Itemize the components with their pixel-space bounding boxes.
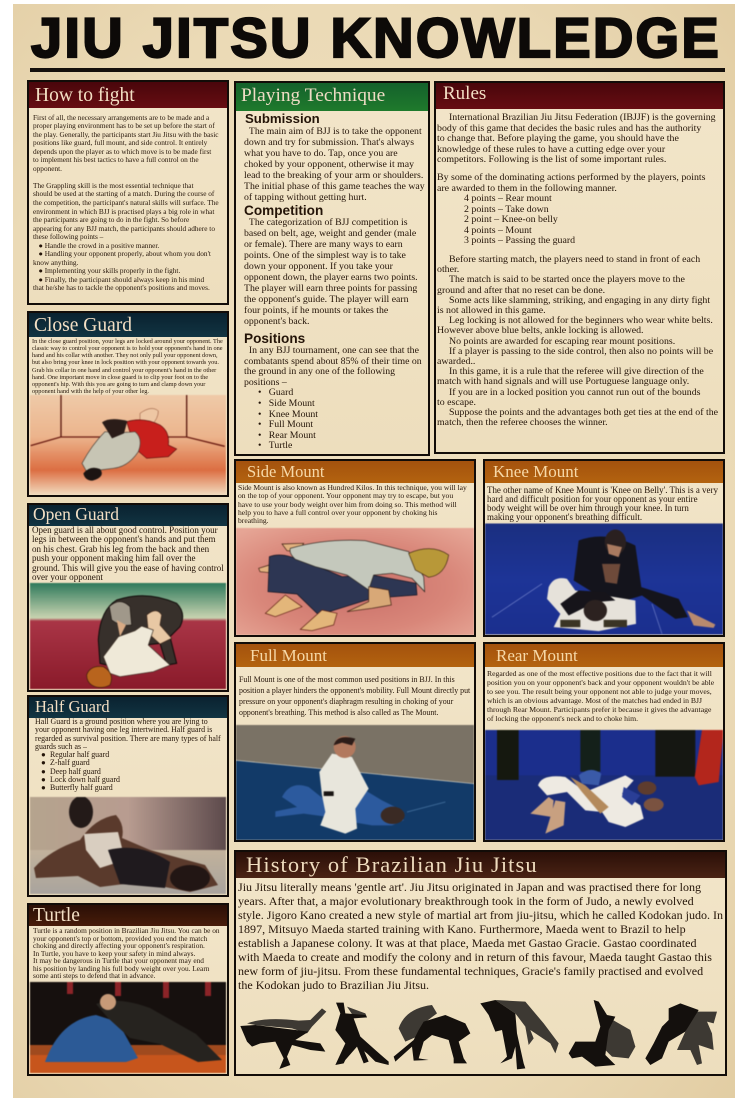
text: rules points list: 2 points – Take down — [464, 204, 549, 214]
text: history: the Kodokan judo to Brazilian Jiu Jitsu. — [238, 978, 429, 992]
text: rules intro: International Brazilian Jiu Jitsu Federation (IBJJF) is the governing — [449, 112, 716, 123]
text: rules intro: competitors. Following is the list of some important rules. — [437, 154, 666, 165]
text: side mount: on the top of your opponent. Your opponent may try to escape, but you — [238, 491, 453, 500]
text: turtle: In Turtle, you have to keep your safety in mind always. — [33, 948, 195, 958]
text: how to fight — [33, 112, 219, 292]
heading: history: History of Brazilian Jiu Jitsu — [246, 852, 538, 877]
text: how to fight: ● Handling your opponent properly, about whom you don't — [38, 249, 211, 258]
heading: open guard: Open Guard — [33, 504, 119, 524]
text: competition: The player will earn three points for passing — [244, 283, 417, 294]
text: knee mount: making your opponent's breathing difficult. — [487, 512, 642, 522]
text: turtle: Turtle is a random position in Brazilian Jiu Jitsu. You can be on — [33, 926, 220, 935]
text: rules points list: 2 point – Knee-on belly — [464, 214, 558, 225]
text: rules points list: 4 points – Mount — [464, 224, 532, 236]
heading: half guard — [29, 697, 227, 718]
heading: turtle — [29, 905, 227, 926]
text: open guard — [32, 525, 224, 582]
text: half guard: Lock down half guard — [50, 775, 120, 784]
panel: knee mount — [483, 459, 725, 637]
text: rules details: awarded.. — [437, 356, 475, 367]
text: half guard — [35, 717, 221, 792]
text: close guard: hand and his collar with another. They not only pull your opponent down, — [32, 352, 218, 359]
text: how to fight: depends upon the player as to which move is to be made first — [33, 147, 211, 156]
text: positions: In any BJJ tournament, one can see that the — [249, 345, 419, 356]
text: how to fight: environment in which BJJ is practised plays a big role in what — [33, 207, 214, 216]
text: rules details: No points are awarded for escaping rear mount positions. — [449, 336, 675, 347]
text: rear mount: through Rear Mount. Participants prefer it because it gives the advantage — [487, 705, 711, 714]
text: how to fight: should be used at the starting of a match. During the course of — [33, 189, 214, 198]
text: competition — [244, 217, 418, 327]
text: history: years. After that, a major evolutionary breakthrough took in the form of Judo, a newly evolved — [238, 894, 694, 908]
text: positions: combatants spend about 85% of their time on — [244, 356, 422, 367]
text: positions: • Knee Mount — [258, 409, 318, 420]
text: rules details: The match is said to be started once the players move to the — [449, 274, 685, 285]
text: positions: • Rear Mount — [258, 430, 316, 441]
heading: close guard — [29, 313, 227, 337]
text: rules details: If you are in a locked position you cannot run out of the bounds — [449, 387, 700, 398]
text: knee mount — [487, 485, 718, 522]
text: rear mount: Regarded as one of the most effective positions due to the fact that it will — [487, 669, 712, 678]
text: turtle: choking and directly affecting your opponent's respiration. — [33, 941, 205, 950]
text: submission: The main aim of BJJ is to take the opponent — [249, 126, 422, 137]
text: how to fight: these following points – — [33, 232, 103, 241]
text: rules points list: By some of the dominating actions performed by the players, points — [437, 172, 706, 183]
illustration: close guard — [29, 394, 227, 494]
text: half guard: Butterfly half guard — [50, 783, 113, 792]
text: half guard: Z-half guard — [50, 758, 90, 767]
text: how to fight: proper playing environment has to be set up before the start of — [33, 121, 215, 130]
text: open guard: on his chest. Grab his leg from the back and then — [32, 544, 209, 554]
text: side mount: have to use your body weight over him from doing so. This method will — [238, 500, 457, 509]
text: submission: what you have to do. Tap, once you are — [244, 148, 398, 159]
text: rules details: match, then the referee chooses the winner. — [437, 417, 608, 428]
text: positions: • Full Mount — [258, 419, 313, 430]
heading: rear mount — [485, 644, 723, 667]
text: submission: choked by your opponent, otherwise it may — [244, 159, 414, 170]
heading: knee mount — [485, 461, 723, 483]
text: open guard: ground. This will give you the ease of having control — [32, 563, 224, 573]
text: close guard: In the close guard position, your legs are locked around your opponent. The — [32, 338, 223, 345]
text: side mount: breathing. — [238, 516, 269, 525]
text: side mount: help you to have a full control over your opponent by choking his — [238, 508, 438, 517]
panel: how to fight — [27, 80, 229, 305]
text: rules points list — [437, 172, 706, 246]
text: rules intro: to change that. Before playing the game, you should have the — [437, 133, 679, 144]
text: how to fight: ● Implementing your skills properly in the fight. — [38, 266, 180, 275]
text: rear mount — [487, 669, 714, 723]
text: half guard: ● — [41, 783, 46, 792]
text: half guard: guards such as – — [35, 742, 87, 751]
text: positions: • Guard — [258, 387, 293, 398]
text: history — [238, 880, 723, 992]
text: open guard: legs in between the opponent's hands and put them — [32, 534, 216, 544]
text: how to fight: the participants are going to do in the fight. So before — [33, 215, 189, 224]
text: close guard: classic way to control your opponent is to hold your opponent's hand in one — [32, 345, 223, 352]
text: knee mount: body weight will be over him through your knee. In turn — [487, 503, 689, 513]
heading: how to fight: How to fight — [35, 85, 135, 106]
text: rules points list: 3 points – Passing the guard — [464, 235, 575, 246]
text: rules details: If a player is passing to the side control, then also no points will be — [449, 346, 713, 357]
photo: half guard — [30, 796, 227, 894]
text: half guard: regarded as survival position. There are many types of half — [35, 734, 221, 742]
panel: rules — [434, 81, 725, 454]
heading: playing technique — [236, 83, 428, 111]
text: competition: opponent down, the player earns two points. — [244, 272, 418, 283]
text: half guard: Hall Guard is a ground position where you are lying to — [35, 717, 208, 726]
text: full mount: opponent's breathing. This method is also called as The Mount. — [239, 708, 438, 717]
text: competition: down your opponent. If you take your — [244, 261, 393, 272]
text: rules details: ground and after that no reset can be done. — [437, 285, 605, 296]
text: full mount: position a player hinders the opponent's mobility. Full Mount directly put — [239, 686, 470, 695]
text: rear mount: position you on your opponent's back and your opponent wouldn't be able — [487, 678, 714, 687]
text: rules details — [437, 254, 718, 428]
text: close guard: opponent hand with the help of your other leg. — [32, 388, 149, 395]
panel: side mount — [234, 459, 476, 637]
text: rules intro: body of this game that decides the basic rules and has the authority — [437, 122, 701, 134]
text: history: Jiu Jitsu literally means 'gentle art'. Jiu Jitsu originated in Japan and was practised there for long — [238, 880, 701, 894]
text: submission: of tapping without getting hurt. — [244, 192, 367, 203]
text: turtle: It may be dangerous in Turtle that your opponent may end — [33, 956, 204, 965]
text: submission — [244, 126, 425, 203]
text: full mount: pressure on your opponent's diaphragm resulting in choking of your — [239, 697, 453, 706]
text: competition: the opponent's guide. The player will earn — [244, 294, 409, 305]
text: history: new form of jiu-jitsu. From these fundamental techniques, Gracie's family practised and evolved — [238, 964, 703, 978]
text: turtle — [33, 926, 220, 980]
text: close guard: hand. One important move in close guard is to clip your foot on to the — [32, 374, 208, 381]
text: half guard: Deep half guard — [50, 766, 101, 776]
text: rear mount: which is an obvious advantage. Most of the matches had ended in BJJ — [487, 696, 702, 705]
text: how to fight: the play. Generally, the participants start Jiu Jitsu with the basic — [33, 130, 218, 139]
text: open guard: over your opponent — [32, 572, 103, 582]
text: how to fight: ● Handle the crowd in a positive manner. — [38, 241, 159, 250]
text: history: style. Jigoro Kano created a new style of martial art from jiu-jitsu, which he called Kodokan judo. In — [238, 908, 723, 922]
heading: rules: Rules — [443, 83, 486, 104]
text: competition: based on belt, age, weight and gender (male — [244, 228, 416, 239]
text: full mount: Full Mount is one of the most common used positions in BJJ. In this — [239, 675, 455, 684]
heading: full mount — [236, 644, 474, 667]
text: how to fight: to implement his best tactics to have a full control on the — [33, 155, 199, 164]
panel: open guard — [27, 503, 229, 692]
text: positions: • Turtle — [258, 440, 292, 451]
text: half guard: ● — [41, 775, 46, 784]
subheading: competition: Competition — [244, 203, 323, 218]
text: open guard: Open guard is all about good control. Position your — [32, 525, 218, 535]
text: rules details: Some acts like slamming, striking, and engaging in any dirty fight — [449, 295, 710, 306]
heading: rules — [436, 83, 723, 109]
text: rules details: to escape. — [437, 397, 476, 408]
heading: side mount: Side Mount — [247, 462, 324, 481]
text: close guard: opponent's hip. With this you are going to turn and clamp down your — [32, 381, 205, 388]
text: history: 1897, Mitsuyo Maeda started training with Kano. Furthermore, Maeda went to Brazil to help — [238, 922, 686, 936]
heading: history — [236, 852, 725, 878]
panel: turtle — [27, 903, 229, 1076]
silhouettes: six grappling pairs — [240, 1000, 717, 1070]
panel: playing technique — [234, 81, 430, 456]
title: JIU JITSU KNOWLEDGE — [31, 6, 721, 69]
text: rear mount: of locking the opponent's neck and to choke him. — [487, 714, 638, 723]
text: rules details: other. — [437, 264, 459, 275]
text: how to fight: the competition, the participant's natural skills will surface. The — [33, 198, 219, 207]
panel: close guard — [27, 311, 229, 497]
text: rear mount: to see you. The result being your opponent not able to judge your moves, — [487, 687, 712, 696]
text: submission: down and try for submission. That's always — [244, 137, 414, 148]
title underline — [30, 68, 725, 72]
text: competition: The categorization of BJJ competition is — [249, 217, 408, 228]
heading: half guard: Half Guard — [35, 697, 110, 716]
text: how to fight: appearing for any BJJ match, the participants should adhere to — [33, 224, 215, 233]
heading: playing technique: Playing Technique — [241, 85, 385, 106]
text: positions: positions – — [244, 377, 287, 388]
text: submission: The initial phase of this game teaches the way — [244, 181, 425, 192]
photo: full mount — [236, 724, 474, 840]
text: rules details: Before starting match, the players need to stand in front of each — [449, 254, 700, 265]
text: close guard: but also bring your knee in lock position with your opponent towards you. — [32, 359, 219, 366]
text: half guard: ● — [41, 766, 46, 776]
illustration: side mount — [236, 528, 474, 635]
text: close guard — [32, 338, 223, 395]
text: positions — [244, 345, 422, 451]
text: half guard: Regular half guard — [50, 750, 109, 759]
text: submission: lead to the breaking of your arm or shoulders. — [244, 170, 423, 181]
text: close guard: Grab his collar in one hand and control your opponent's hand in the other — [32, 367, 216, 374]
heading: knee mount: Knee Mount — [493, 462, 578, 481]
text: how to fight: ● Finally, the participant should always keep in his mind — [38, 275, 204, 284]
text: how to fight: The Grappling skill is the most essential technique that — [33, 181, 194, 190]
heading: close guard: Close Guard — [34, 315, 132, 336]
text: rules details: match with hand signals and will use Portuguese language only. — [437, 376, 689, 387]
text: competition: points. One of the simplest way is to take — [244, 250, 406, 261]
heading: side mount — [236, 461, 474, 483]
text: competition: or female). There are many ways to earn — [244, 239, 403, 250]
text: side mount — [238, 483, 467, 525]
panel: half guard — [27, 695, 229, 897]
text: rules details: Leg locking is not allowed for the beginners who wear white belts. — [449, 315, 713, 326]
text: positions: the ground in any one of the following — [244, 366, 395, 377]
photo: turtle — [29, 981, 227, 1074]
text: history: establish a Japanese colony. It was at that place, Maeda met Gastao Gracie. Gastao coordinated — [238, 936, 696, 950]
text: how to fight: positions like guard, full mount, and side control. It entirely — [33, 138, 207, 147]
text: how to fight: that he/she has to tackle the opponent's positions and moves. — [33, 283, 210, 292]
text: turtle: some anti steps to defend that in advance. — [33, 971, 155, 980]
heading: how to fight — [29, 82, 227, 108]
subheading: positions: Positions — [244, 331, 305, 346]
text: half guard: ● — [41, 758, 46, 767]
text: rules details: Suppose the points and the advantages both get ties at the end of the — [449, 407, 718, 418]
text: competition: opponent's back. — [244, 316, 309, 327]
text: rules details: In this game, it is a rule that the referee will give direction of the — [449, 366, 704, 377]
text: side mount: Side Mount is also known as Hundred Kilos. In this technique, you will lay — [238, 483, 467, 492]
panel: rear mount — [483, 642, 725, 842]
text: half guard: your opponent having one leg intertwined. Half guard is — [35, 725, 212, 734]
panel: history of brazilian jiu jitsu — [234, 850, 727, 1076]
text: rules points list: are awarded to them in the following manner. — [437, 182, 617, 194]
text: full mount — [239, 675, 470, 717]
heading: turtle: Turtle — [33, 905, 80, 926]
photo: rear mount — [485, 729, 723, 840]
text: how to fight: First of all, the necessary arrangements are to be made and a — [33, 112, 209, 122]
text: half guard: ● — [41, 750, 46, 759]
text: knee mount: The other name of Knee Mount is 'Knee on Belly'. This is a very — [487, 485, 718, 495]
text: open guard: push your opponent making him fall over the — [32, 553, 196, 563]
text: history: with Maeda to create and modify the colony and in return of this favour, Maeda taught Gastao this — [238, 950, 712, 964]
illustration: open guard — [29, 582, 227, 690]
text: how to fight: opponent. — [33, 164, 62, 173]
heading: rear mount: Rear Mount — [496, 646, 578, 665]
text: rules intro — [437, 112, 716, 165]
subheading: submission: Submission — [245, 111, 320, 126]
heading: open guard — [29, 505, 227, 526]
text: competition: four points, if he mounts or takes the — [244, 305, 388, 316]
text: rules details: is not allowed in this game. — [437, 305, 546, 316]
text: how to fight: know anything. — [33, 258, 78, 267]
heading: full mount: Full Mount — [250, 646, 327, 665]
text: turtle: your opponent's top or bottom, provided you end the match — [33, 934, 207, 942]
text: rules intro: knowledge of these rules to have a cutting edge over your — [437, 144, 665, 154]
photo: knee mount — [485, 522, 723, 635]
panel: full mount — [234, 642, 476, 842]
text: turtle: his position by landing his full body weight over you. Learn — [33, 964, 209, 972]
text: knee mount: hard and difficult position for your opponent as your entire — [487, 494, 698, 504]
text: rules details: However above blue belts, ankle locking is allowed. — [437, 325, 644, 336]
text: positions: • Side Mount — [258, 398, 315, 409]
text: rules points list: 4 points – Rear mount — [464, 193, 552, 204]
